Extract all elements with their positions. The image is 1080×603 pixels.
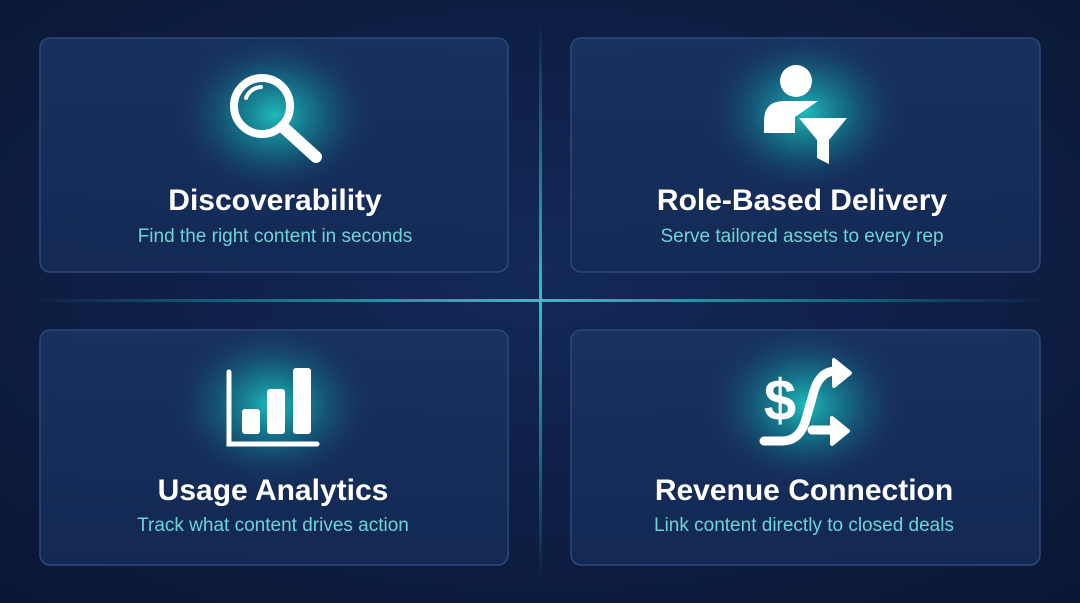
text: role-based subtitle: Serve tailored assets to every rep <box>660 226 944 247</box>
icon: dollar with arrows <box>764 360 850 444</box>
panel: usage analytics <box>40 323 508 565</box>
text: discoverability subtitle: Find the right content in seconds <box>138 226 412 247</box>
icon: magnifying glass <box>234 78 316 157</box>
icon: person with filter <box>764 65 847 164</box>
heading: discoverability: Discoverability <box>168 184 382 217</box>
panel: revenue connection <box>571 323 1040 565</box>
panel: role-based delivery <box>571 30 1040 272</box>
icon: bar chart <box>229 368 317 444</box>
icon: dollar with arrows: $ <box>764 368 796 433</box>
heading: role-based delivery: Role-Based Delivery <box>657 184 947 217</box>
text: revenue subtitle: Link content directly to closed deals <box>654 515 954 536</box>
heading: revenue connection: Revenue Connection <box>655 474 953 507</box>
text: analytics subtitle: Track what content drives action <box>137 515 409 536</box>
panel: discoverability <box>40 33 508 272</box>
heading: usage analytics: Usage Analytics <box>158 474 388 507</box>
